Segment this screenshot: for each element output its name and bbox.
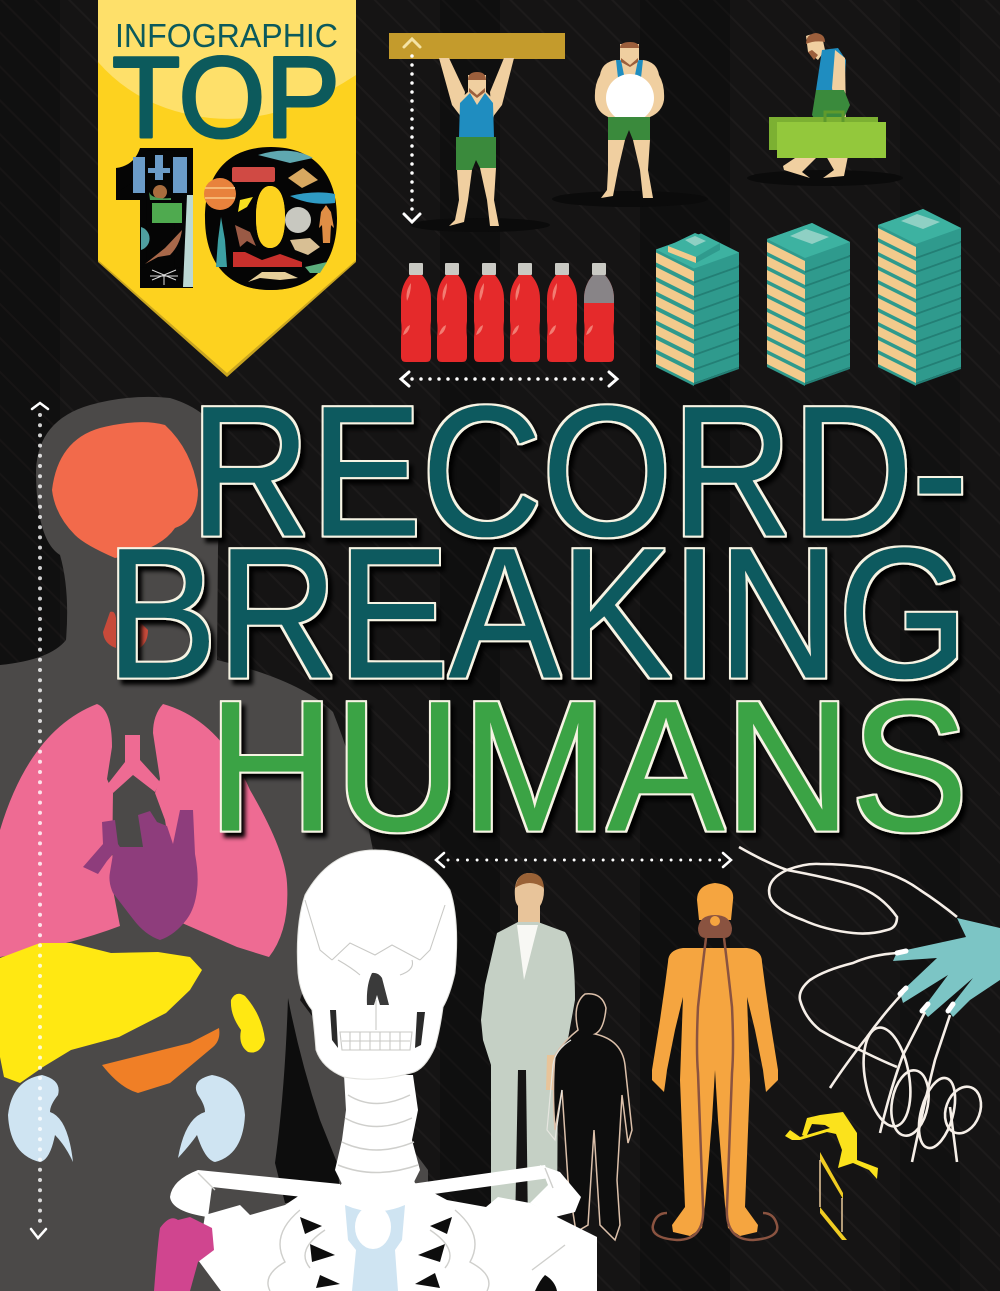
skeleton (154, 850, 597, 1291)
sternum (345, 1205, 405, 1291)
dark gap between arm and torso (275, 998, 340, 1203)
orange figure with long hair (652, 883, 778, 1240)
dotted span arrow (436, 853, 731, 867)
kidneys (8, 1075, 245, 1162)
hurdler (785, 1112, 878, 1240)
spleen (231, 994, 265, 1052)
strongman carrying box (747, 33, 903, 186)
dotted height arrow (404, 39, 420, 222)
body silhouette (0, 397, 428, 1291)
badge: Infographic Top 10 (98, 0, 356, 377)
bottles (401, 263, 614, 362)
book stack 2 (767, 223, 850, 386)
skull (297, 850, 457, 1079)
ten digits: 1 (100, 108, 211, 331)
heart (83, 810, 198, 940)
pancreas (102, 1028, 219, 1093)
title line 3: HUMANS (208, 664, 968, 870)
lungs (0, 704, 287, 957)
humerus (154, 1217, 214, 1291)
brain (52, 422, 198, 558)
series name: INFOGRAPHIC (115, 17, 338, 54)
ten digits (116, 147, 337, 290)
liver (0, 943, 202, 1083)
skull features (305, 900, 445, 1050)
dotted width arrow (401, 372, 617, 386)
title (106, 369, 968, 870)
book stack 1 (656, 233, 739, 386)
bronchi (107, 735, 160, 793)
thyroid (103, 612, 148, 650)
vertical arrow left (31, 403, 48, 1238)
hand with long nails (739, 847, 1000, 1162)
neck vertebrae (335, 1075, 420, 1190)
top: TOP (112, 34, 340, 162)
book stack 3 (878, 209, 961, 386)
strongman holding ball (552, 42, 708, 207)
outline man (547, 994, 632, 1240)
mini icons in the digits (133, 151, 335, 287)
torso bones (170, 1165, 597, 1291)
ten digits: 0 (198, 106, 344, 331)
man in suit (481, 873, 575, 1230)
strongman lifting bar (389, 33, 565, 232)
banner (98, 0, 356, 377)
